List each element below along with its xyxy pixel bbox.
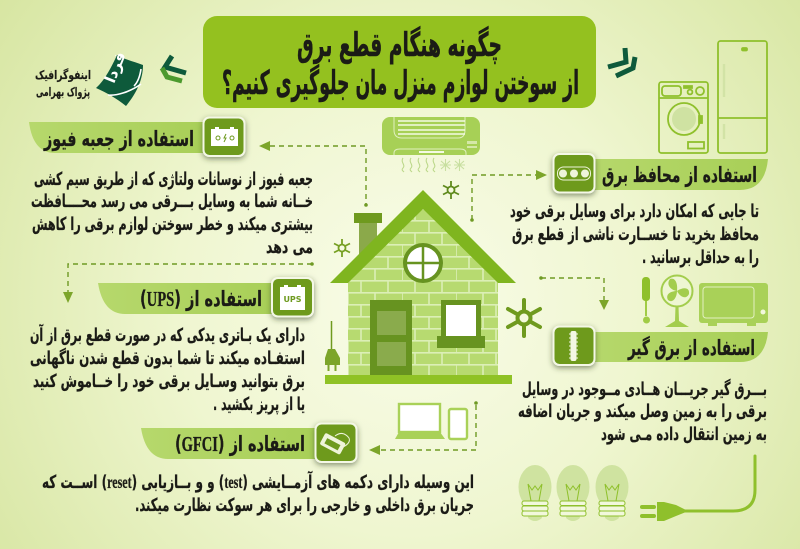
icon: battery fuse box <box>204 118 244 156</box>
body text: جعبه فیوز از نوسانات ولتاژی که از طریق سیم کشی <box>34 169 313 190</box>
body text: جریان برق داخلی و خارجی را برای هر سوکت نظارت میکند. <box>135 495 474 516</box>
washing machine <box>659 82 708 153</box>
body text <box>31 169 313 258</box>
gear: small left <box>334 239 350 257</box>
logo <box>96 49 143 106</box>
bulb 3 <box>596 465 628 521</box>
body text: خــانه شما به وسایل بـــرقی می رسد محــــافظت <box>31 191 313 212</box>
panel: GFCI <box>42 424 474 516</box>
body text: یا از پریز بکشید . <box>213 394 305 415</box>
logo caption: اینفوگرافیک <box>35 68 91 83</box>
fan <box>662 276 692 327</box>
logo caption <box>35 68 91 100</box>
body text <box>30 323 305 415</box>
body text <box>42 470 474 516</box>
icon: GFCI socket <box>316 424 356 462</box>
window <box>437 300 485 348</box>
body text: می دهد <box>266 237 313 258</box>
heading band: استفاده از (UPS) <box>140 287 262 311</box>
right chevrons <box>608 48 635 76</box>
panel: surge protector <box>510 154 768 268</box>
heading band <box>29 122 210 153</box>
dashed connector: surge protector <box>470 170 547 222</box>
roof <box>330 190 516 283</box>
icon: UPS battery <box>272 278 313 316</box>
logo caption: پژواک بهرامی <box>36 85 90 100</box>
laptop <box>395 404 445 439</box>
panel: fuse box <box>29 118 313 258</box>
body text: بیشتری میکند و خطر سوختن لوازم برقی را کاهش <box>32 214 313 235</box>
refrigerator <box>718 41 767 153</box>
panel: UPS <box>30 278 313 415</box>
light bulbs <box>518 465 628 521</box>
body text: استفـاده میکند تا شما بدون قطع شدن ناگهانی <box>30 347 305 369</box>
body text: این وسیله دارای دکمه های آزمــایشی (test) و و بــازیابی (reset) اســت که <box>42 470 474 493</box>
bulb 1 <box>518 465 552 521</box>
heading band <box>98 283 278 314</box>
icon: power strip <box>554 154 594 192</box>
bulb 2 <box>556 465 590 521</box>
body text <box>518 378 767 445</box>
left chevrons <box>162 56 186 81</box>
heading band: استفاده از (GFCI) <box>175 432 305 456</box>
chimney <box>354 213 382 257</box>
cord and plug <box>640 456 755 521</box>
round window <box>405 245 441 281</box>
mixer <box>642 277 650 324</box>
logo: فردا <box>101 49 130 85</box>
brick wall <box>348 208 498 376</box>
dashed connector: lightning arrester <box>539 276 609 310</box>
title banner <box>203 16 596 108</box>
gear: small top <box>443 181 459 199</box>
body text <box>510 201 759 268</box>
plug beside house <box>325 321 340 371</box>
air flow <box>402 158 465 172</box>
air conditioner <box>382 117 480 155</box>
heading band: استفاده از جعبه فیوز <box>43 127 194 151</box>
ground slab <box>325 375 512 384</box>
panel: lightning arrester <box>518 326 768 445</box>
heading band <box>141 428 320 459</box>
body text: دارای یک بـاتری یدکی که در صورت قطع برق از آن <box>30 323 305 346</box>
phone <box>449 409 467 439</box>
microwave <box>699 283 768 326</box>
icon: arrester <box>554 326 594 365</box>
icon: UPS battery: UPS <box>283 295 302 304</box>
door <box>370 300 412 375</box>
title banner: چگونه هنگام قطع برق <box>297 25 502 65</box>
gear: large right <box>508 300 540 336</box>
house <box>325 190 516 384</box>
dashed connector: UPS <box>63 262 314 303</box>
dashed connector: GFCI <box>369 401 478 455</box>
heading band <box>585 332 768 362</box>
body text: برق بتوانید وسـایل برقی خود را خــاموش کنید <box>33 371 305 392</box>
dashed connector: fuse box <box>259 141 368 207</box>
heading band <box>585 159 768 190</box>
